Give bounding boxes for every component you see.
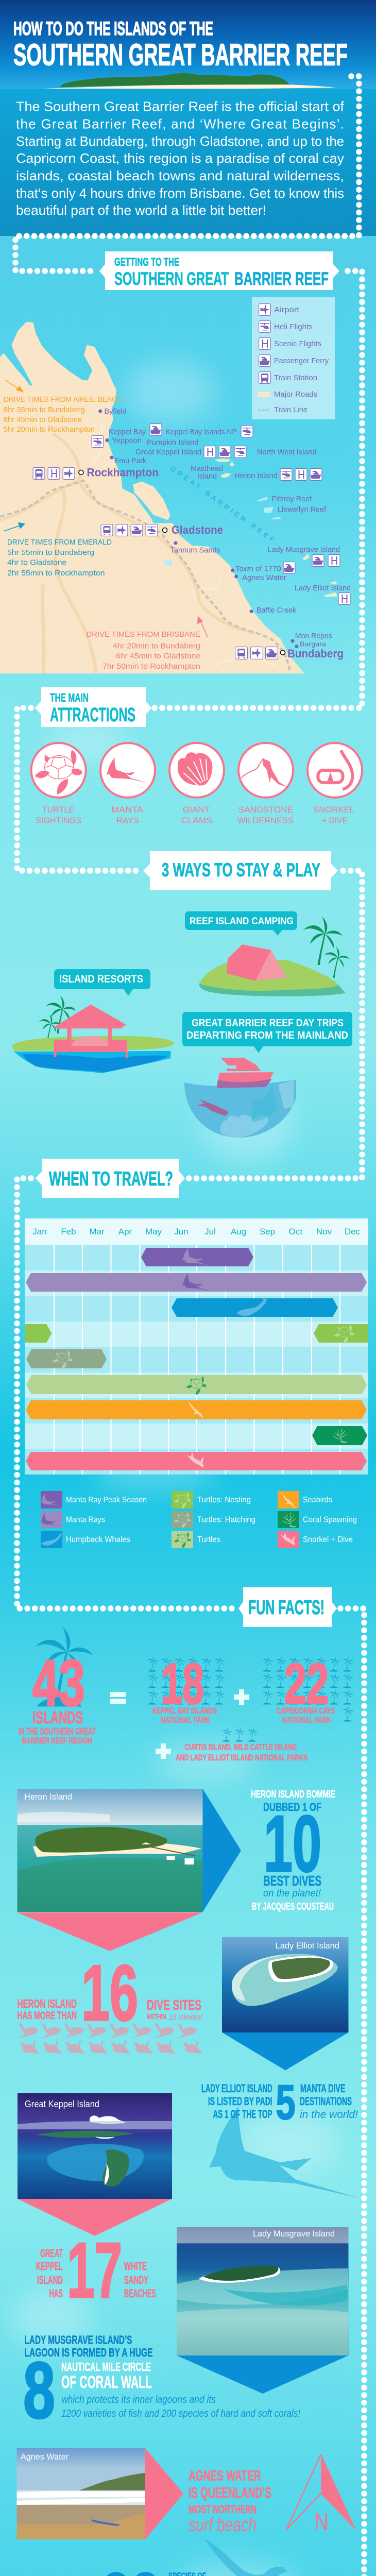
heading: the main attractions: ATTRACTIONS: [50, 704, 135, 726]
calendar legend: Manta Ray Peak Season: [66, 1496, 147, 1504]
map: place names and markers: Keppel Bay: [109, 428, 146, 436]
map: land, roads and rail: [0, 322, 338, 673]
fact: heron island bommie: BEST DIVES: [263, 1873, 321, 1889]
arrow: blue down: [177, 2355, 348, 2394]
fact: 17 beaches: GREAT: [40, 2247, 63, 2260]
photo label: Heron Island: Heron Island: [24, 1792, 72, 1802]
calendar: months: Dec: [345, 1227, 361, 1236]
map: place names and markers: Town of 1770: [235, 565, 281, 573]
photo: Lady Musgrave Island: [177, 2227, 348, 2355]
calendar legend: Coral Spawning: [303, 1516, 357, 1524]
fact: lady musgrave lagoon: which protects its inner lagoons and its: [61, 2394, 216, 2405]
fact: 17 beaches: SANDY: [124, 2274, 148, 2286]
map: transport icons: [33, 424, 350, 659]
calendar: months: Aug: [231, 1227, 246, 1236]
photo: Agnes Water: [16, 2448, 145, 2539]
calendar bar: snorkel and dive: [26, 1452, 367, 1470]
calendar bar: manta ray peak season: [141, 1248, 253, 1266]
illustration: seabird: [205, 2539, 299, 2576]
callout: reef island camping: REEF ISLAND CAMPING: [190, 916, 294, 927]
attraction: turtle sightings: [31, 743, 86, 825]
heading: the main attractions: [35, 687, 151, 727]
map: place names and markers: Bundaberg: [287, 647, 344, 660]
fact: lady musgrave lagoon: OF CORAL WALL: [61, 2372, 152, 2392]
heading: getting to the southern great barrier reef: SOUTHERN GREAT: [114, 269, 229, 289]
map: place names and markers: Bargara: [300, 640, 327, 648]
fact: heron island bommie: 10: [264, 1799, 321, 1888]
callout: island resorts: ISLAND RESORTS: [59, 973, 143, 985]
calendar bar: turtles: [26, 1375, 367, 1395]
drive times from Airlie Beach: 8hr 35min to Bundaberg: [4, 405, 85, 414]
fact: 18 keppel bay islands: NATIONAL PARK: [161, 1715, 210, 1725]
calendar: months: Nov: [316, 1227, 332, 1236]
fact: other national parks: AND LADY ELLIOT ISLAND NATIONAL PARKS: [176, 1753, 307, 1762]
fact: 16 dive sites: DIVE SITES: [147, 1997, 201, 2013]
fact: 43 islands: BARRIER REEF REGION: [22, 1736, 92, 1745]
map legend: Heli Flights: [274, 323, 313, 331]
fact: 22 capricornia cays: CAPRICORNIA CAYS: [277, 1706, 335, 1716]
calendar: months: Jan: [32, 1227, 47, 1236]
fact: lady elliot manta dive: LADY ELLIOT ISLAND: [201, 2082, 272, 2095]
fact: lady musgrave lagoon: LAGOON IS FORMED BY A HUGE: [25, 2346, 152, 2359]
photo label: Great Keppel Island: Great Keppel Island: [25, 2099, 99, 2109]
callout: great barrier reef day trips: [182, 1012, 352, 1053]
fact: lady musgrave lagoon: [23, 2333, 300, 2435]
map: place names and markers: Emu Park: [114, 456, 146, 465]
heading: getting to the southern great barrier reef: [99, 251, 339, 290]
fact: agnes water surf beach: IS QUEENLAND’S: [189, 2485, 271, 2501]
map: place names and markers: Pumpkin Island: [147, 438, 199, 447]
arrow: pink right: [145, 2448, 183, 2539]
fact: 16 dive sites: HERON ISLAND: [18, 1997, 77, 2010]
heading: fun facts: FUN FACTS!: [248, 1597, 324, 1619]
fact: 18 keppel bay islands: 18: [161, 1652, 204, 1716]
calendar: grid: [25, 1218, 368, 1475]
heading: the main attractions: THE MAIN: [50, 691, 89, 704]
map legend: Major Roads: [274, 390, 317, 399]
illustration: island resort: [12, 995, 175, 1073]
fact: agnes water surf beach: [189, 2468, 271, 2536]
drive times from Brisbane: 7hr 50min to Rockhampton: [102, 662, 200, 671]
map: place names and markers: Yeppoon: [112, 436, 142, 445]
fact: agnes water surf beach: MOST NORTHERN: [189, 2503, 257, 2516]
calendar legend: Humpback Whales: [66, 1535, 130, 1544]
fact: 22 species of seabird: [101, 2557, 311, 2576]
calendar legend: Snorkel + Dive: [303, 1535, 353, 1544]
map: place names and markers: Heron Island: [234, 471, 278, 480]
drive times from Brisbane: [87, 616, 208, 671]
drive times from Emerald: 2hr 55min to Rockhampton: [7, 569, 105, 578]
photo label: Agnes Water: Agnes Water: [21, 2452, 69, 2462]
drive times from Emerald: DRIVE TIMES FROM EMERALD: [7, 538, 112, 547]
fact: heron island bommie: [251, 1789, 335, 1912]
map: Great Barrier Reef label: GREAT BARRIER REEF: [169, 464, 276, 544]
calendar: months: Jun: [174, 1227, 189, 1236]
map: place names and markers: Great Keppel Island: [135, 448, 201, 456]
fact: heron island bommie: BY JACQUES COUSTEAU: [252, 1901, 334, 1912]
heading: fun facts: [238, 1587, 337, 1627]
fact: 17 beaches: KEPPEL: [36, 2260, 63, 2273]
heading: getting to the southern great barrier reef: BARRIER REEF: [234, 269, 329, 289]
illustration: camping island: [199, 916, 349, 996]
fact: lady musgrave lagoon: 8: [23, 2346, 55, 2435]
calendar: months: Sep: [260, 1227, 275, 1236]
calendar legend: [41, 1491, 357, 1548]
attraction: sandstone wilderness: [237, 743, 294, 825]
intro paragraph: Starting at Bundaberg, through Gladstone, and up to the: [16, 133, 344, 149]
map legend: Train Line: [274, 405, 307, 414]
attraction: snorkel and dive: + DIVE: [322, 816, 348, 825]
attraction: manta rays: RAYS: [116, 816, 139, 825]
callout: great barrier reef day trips: GREAT BARRIER REEF DAY TRIPS: [192, 1018, 344, 1029]
equals sign: [110, 1692, 126, 1704]
attraction: sandstone wilderness: SANDSTONE: [238, 805, 293, 815]
fact: 22 capricornia cays: NATIONAL PARK: [282, 1715, 331, 1725]
callout: great barrier reef day trips: DEPARTING FROM THE MAINLAND: [186, 1030, 348, 1041]
calendar: months: Jul: [204, 1227, 216, 1236]
drive times from Emerald: 4hr to Gladstone: [7, 558, 66, 567]
map: place names and markers: North West Island: [257, 448, 317, 456]
fact: 22 capricornia cays: [262, 1652, 353, 1725]
map: place names and markers: Tannum Sands: [170, 546, 220, 555]
attraction: snorkel and dive: SNORKEL: [313, 805, 354, 815]
fact: 16 dive sites: 15 minutes!: [169, 2013, 203, 2022]
calendar legend: Turtles: Hatching: [197, 1516, 255, 1524]
fact: lady musgrave lagoon: 1200 varieties of fish and 200 species of hard and soft corals!: [61, 2408, 300, 2419]
fact: lady elliot manta dive: 5: [276, 2075, 296, 2130]
callout: island resorts: [54, 969, 150, 996]
calendar: months: Mar: [89, 1227, 105, 1236]
heading: when to travel: WHEN TO TRAVEL?: [49, 1168, 173, 1190]
attraction: manta rays: MANTA: [111, 805, 144, 815]
hero: sky: [0, 0, 376, 89]
intro paragraph: the Great Barrier Reef, and ‘Where Great Begins’.: [16, 116, 344, 132]
intro paragraph: Capricorn Coast, this region is a paradise of coral cay: [16, 150, 344, 166]
photo label: Lady Elliot Island: Lady Elliot Island: [275, 1941, 339, 1951]
photo: Heron Island: [18, 1789, 203, 1912]
calendar bar: turtles hatching: [26, 1349, 107, 1369]
arrow: pink down: [18, 2199, 172, 2236]
map legend: [252, 297, 335, 419]
plus sign: [234, 1689, 249, 1705]
calendar bar: humpback whales: [172, 1298, 338, 1317]
fact: 16 dive sites: HAS MORE THAN: [18, 2010, 77, 2022]
arrow: blue down: [222, 2032, 348, 2070]
attraction: sandstone wilderness: WILDERNESS: [237, 816, 294, 825]
arrow: blue right: [203, 1789, 241, 1912]
arrow: pink down: [18, 1912, 203, 1951]
intro paragraph: beautiful part of the world a little bit better!: [16, 202, 266, 218]
map: place names and markers: Island: [197, 472, 217, 481]
fact: lady elliot manta dive: MANTA DIVE: [300, 2082, 345, 2095]
map: place names and markers: Keppel Bay Isands NP: [166, 428, 237, 436]
fact: 16 dive sites: WITHIN: [147, 2012, 166, 2021]
map legend: Scenic Flights: [274, 340, 321, 348]
map: place names and markers: Baffle Creek: [257, 606, 296, 615]
drive times from Airlie Beach: 6hr 45min to Gladstone: [4, 415, 82, 424]
fact: heron island bommie: on the planet!: [263, 1888, 321, 1899]
fact: 17 beaches: 17: [67, 2227, 122, 2314]
fact: other national parks: CURTIS ISLAND, WILD CATTLE ISLAND: [184, 1742, 297, 1752]
fact: lady elliot manta dive: IS LISTED BY PADI: [208, 2095, 272, 2108]
calendar bar: seabirds: [26, 1400, 367, 1419]
attraction: manta rays: [100, 743, 155, 825]
drive times from Emerald: [4, 522, 112, 578]
fact: 16 dive sites: [18, 1949, 203, 2054]
fact: 16 dive sites: 16: [81, 1949, 138, 2037]
map: place names and markers: Llewellyn Reef: [278, 505, 327, 514]
attraction: giant clams: GIANT: [183, 805, 210, 815]
fact: 17 beaches: ISLAND: [37, 2274, 63, 2286]
fact: 43 islands: IN THE SOUTHERN GREAT: [19, 1726, 96, 1737]
calendar: months: Oct: [289, 1227, 302, 1236]
map: place names and markers: Gladstone: [172, 523, 223, 536]
fact: agnes water surf beach: AGNES WATER: [189, 2468, 261, 2483]
map legend: Train Station: [274, 374, 317, 382]
fact: 17 beaches: BEACHES: [124, 2287, 156, 2300]
icon: north arrow: [286, 2453, 356, 2536]
map: place names and markers: Byfield: [104, 407, 127, 416]
heading: getting to the southern great barrier reef: GETTING TO THE: [114, 256, 179, 268]
calendar: months: Feb: [61, 1227, 76, 1236]
fact: 17 beaches: WHITE: [124, 2260, 147, 2273]
map legend: Airport: [274, 306, 300, 314]
map legend: Passenger Ferry: [274, 357, 329, 365]
drive times from Brisbane: 6hr 45min to Gladstone: [116, 652, 200, 660]
callout: reef island camping: [185, 911, 297, 936]
fact: 43 islands: [19, 1626, 96, 1745]
attraction: turtle sightings: SIGHTINGS: [36, 816, 81, 825]
map: place names and markers: Agnes Water: [242, 573, 286, 582]
intro paragraph: that‘s only 4 hours drive from Brisbane. Get to know this: [16, 185, 344, 201]
fact: 18 keppel bay islands: KEPPEL BAY ISLANDS: [152, 1706, 217, 1716]
icon: north arrow: N: [314, 2509, 329, 2536]
fact: 43 islands: 43: [32, 1647, 85, 1719]
drive times from Brisbane: DRIVE TIMES FROM BRISBANE: [87, 630, 200, 639]
fact: 22 capricornia cays: 22: [284, 1652, 329, 1716]
illustration: boat and reef: [184, 1058, 296, 1138]
photo: Lady Elliot Island: [222, 1937, 348, 2032]
map: place names and markers: [79, 407, 351, 660]
fact: other national parks: [156, 1727, 307, 1762]
intro paragraph: The Southern Great Barrier Reef is the official start of: [16, 99, 345, 114]
calendar legend: Manta Rays: [66, 1516, 105, 1524]
heading: when to travel: [36, 1159, 185, 1198]
fact: lady elliot manta dive: [201, 2075, 358, 2198]
drive times from Airlie Beach: [4, 380, 122, 434]
title: [13, 18, 348, 72]
map: place names and markers: Lady Musgrave Island: [268, 545, 340, 554]
map: place names and markers: Fitzroy Reef: [272, 495, 312, 503]
intro paragraph: islands, coastal beach towns and natural wilderness,: [16, 168, 344, 183]
fact: lady musgrave lagoon: LADY MUSGRAVE ISLAND’S: [25, 2333, 132, 2346]
attraction: snorkel and dive: [307, 743, 362, 825]
fact: lady elliot manta dive: in the world!: [300, 2109, 358, 2121]
fact: heron island bommie: DUBBED 1 OF: [263, 1801, 321, 1814]
calendar: months: May: [145, 1227, 162, 1236]
intro paragraph: [16, 99, 345, 218]
fact: heron island bommie: HERON ISLAND BOMMIE: [251, 1789, 335, 1800]
heading: 3 ways to stay and play: [143, 851, 338, 890]
fact: lady elliot manta dive: AS 1 OF THE TOP: [213, 2108, 272, 2121]
drive times from Airlie Beach: 5hr 20min to Rockhampton: [4, 425, 95, 434]
fact: agnes water surf beach: surf beach: [189, 2514, 257, 2536]
photo: Great Keppel Island: [18, 2093, 172, 2199]
attraction: giant clams: CLAMS: [181, 816, 212, 825]
map: place names and markers: Masthead: [191, 464, 223, 473]
calendar bar: turtles nesting: [25, 1324, 368, 1344]
map: place names and markers: Rockhampton: [87, 466, 159, 479]
fact: 43 islands: ISLANDS: [32, 1708, 83, 1727]
calendar legend: Seabirds: [303, 1496, 332, 1504]
map: place names and markers: Mon Repos: [295, 632, 332, 640]
drive times from Airlie Beach: DRIVE TIMES FROM AIRLIE BEACH: [4, 395, 122, 404]
calendar bar: manta rays: [26, 1273, 367, 1292]
attraction: giant clams: [169, 743, 224, 825]
calendar legend: Turtles: [197, 1535, 220, 1544]
calendar bar: coral spawning: [312, 1426, 367, 1445]
attraction: turtle sightings: TURTLE: [42, 805, 74, 815]
title: HOW TO DO THE ISLANDS OF THE: [13, 18, 213, 39]
fact: 17 beaches: HAS: [49, 2287, 63, 2300]
hero: island: [44, 73, 336, 89]
map: place names and markers: Lady Elliot Island: [295, 584, 351, 592]
hero: sea: [0, 89, 376, 236]
calendar: months: [32, 1227, 361, 1236]
calendar legend: Turtles: Nesting: [197, 1496, 251, 1504]
calendar: months: Apr: [118, 1227, 132, 1236]
fact: lady musgrave lagoon: NAUTICAL MILE CIRCLE: [61, 2360, 151, 2374]
photo label: Lady Musgrave Island: Lady Musgrave Island: [253, 2229, 335, 2239]
drive times from Brisbane: 4hr 20min to Bundaberg: [113, 642, 200, 651]
drive times from Emerald: 5hr 55min to Bundaberg: [7, 548, 94, 557]
